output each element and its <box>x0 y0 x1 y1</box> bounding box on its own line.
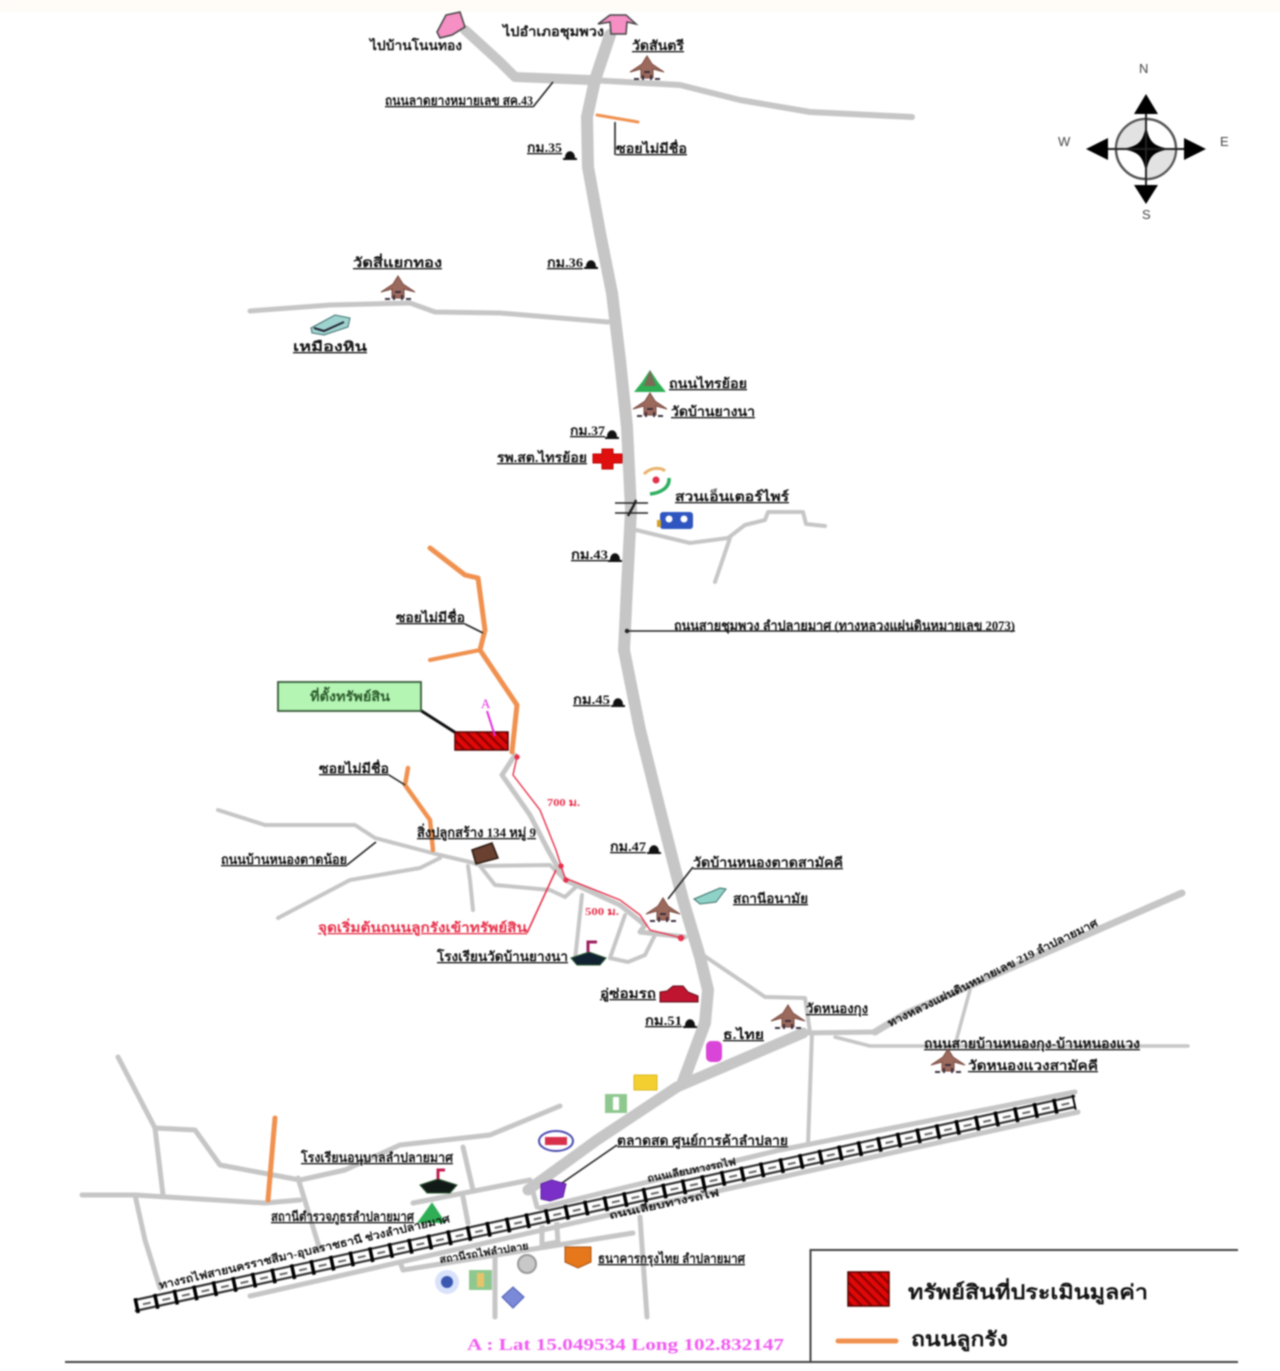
blue round logo <box>435 1270 459 1294</box>
building number label: สิ่งปลูกสร้าง 134 หมู่ 9 <box>417 823 536 841</box>
coordinates: A : Lat 15.049534 Long 102.832147 <box>467 1335 785 1354</box>
leader: callout to property <box>420 710 456 733</box>
label: road with leader <box>385 82 553 108</box>
rail labels right: ถนนเลียบทางรถไฟ <box>608 1186 720 1222</box>
seven eleven sign left <box>605 1094 627 1113</box>
factory icon <box>293 315 367 354</box>
bank icon and label <box>706 1026 764 1062</box>
temple Santri <box>630 38 684 80</box>
label: unnamed alley north <box>615 122 687 156</box>
temple Nong Kung <box>771 1001 868 1029</box>
garden label: สวนเอ็นเตอร์ไพร์ <box>675 487 789 504</box>
compass rose <box>1058 61 1229 222</box>
side roads <box>82 303 1188 1317</box>
km 36: กม.36 <box>547 255 584 270</box>
north-east highway <box>875 893 1182 1032</box>
legend <box>65 1250 1238 1362</box>
label: unnamed alley upper: ซอยไม่มีชื่อ <box>396 608 465 625</box>
distance label 700 m: 700 ม. <box>547 798 581 809</box>
main highway 2073 <box>587 35 708 1082</box>
callout: property location: ที่ตั้งทรัพย์สิน <box>310 686 390 704</box>
km 51 <box>645 1013 697 1028</box>
southern trunk road <box>528 1033 803 1190</box>
camera shop icon <box>657 512 693 529</box>
km 35 north: กม.35 <box>527 140 563 155</box>
rotated highway label: ทางหลวงแผ่นดินหมายเลข 219 ลำปลายมาศ <box>886 916 1101 1030</box>
grey round logo <box>518 1255 536 1273</box>
school <box>436 942 606 965</box>
hospital <box>497 449 622 469</box>
market label and icon: ตลาดสด ศูนย์การค้าลำปลาย <box>617 1133 788 1149</box>
callout: property location <box>278 682 421 711</box>
km 36 <box>547 255 598 270</box>
legend text: laterite road: ถนนลูกรัง <box>911 1329 1008 1353</box>
km 43: กม.43 <box>571 547 609 562</box>
school south west <box>300 1149 457 1193</box>
legend text: property: ทรัพย์สินที่ประเมินมูลค่า <box>908 1277 1148 1306</box>
diamond logo <box>502 1287 524 1308</box>
police station label and icon: สถานีตำรวจภูธรลำปลายมาศ <box>271 1209 415 1225</box>
label: road with leader: ถนนลาดยางหมายเลข สค.43 <box>385 93 533 108</box>
health station <box>694 888 808 906</box>
label: วัดสันตรี <box>632 38 684 53</box>
distance label 500 m: 500 ม. <box>585 907 620 918</box>
temple Nong Waeng: วัดหนองแวงสามัคคี <box>968 1058 1098 1073</box>
rail labels right <box>608 1155 737 1222</box>
bank icon and label: ธ.ไทย <box>723 1026 764 1042</box>
label: unnamed alley lower: ซอยไม่มีชื่อ <box>319 759 389 776</box>
bridge symbol <box>615 500 648 516</box>
rail label left: ทางรถไฟสายนครราชสีมา-อุบลราชธานี ช่วงลำปลายมาศ <box>158 1211 452 1293</box>
compass N: N <box>1139 61 1148 76</box>
station road label: สถานีรถไฟลำปลาย <box>438 1239 530 1266</box>
health station: สถานีอนามัย <box>733 891 808 906</box>
marker A arrow <box>487 711 495 736</box>
garage and car <box>600 986 698 1002</box>
temple Ban Nong Ta Yai: วัดบ้านหนองตาดสามัคคี <box>693 855 843 870</box>
label: unnamed alley north: ซอยไม่มีชื่อ <box>616 139 687 156</box>
highway label: ถนนสายชุมพวง ลำปลายมาศ (ทางหลวงแผ่นดินหมายเลข 2073) <box>674 618 1015 634</box>
label: road left: ถนนบ้านหนองตาดน้อย <box>221 852 347 867</box>
temple Si Yaek Thong <box>353 253 442 300</box>
seven eleven sign south <box>469 1270 492 1290</box>
tree and Sai Yoi label <box>634 370 747 392</box>
top cross road west <box>465 30 590 80</box>
red access route <box>513 755 684 940</box>
label: branch road east: ถนนสายบ้านหนองกุง-บ้านหนองแวง <box>924 1036 1140 1052</box>
km 37 <box>570 423 619 439</box>
label: road left <box>221 842 376 867</box>
railway <box>135 1096 1075 1311</box>
tree and Sai Yoi label: ถนนไทรย้อย <box>669 375 747 391</box>
green and red round logo <box>644 468 669 494</box>
compass W: W <box>1058 134 1071 149</box>
km 35 north <box>527 140 577 160</box>
fuel station logo <box>539 1131 573 1151</box>
icon: destination north <box>598 15 636 34</box>
km 43 <box>571 547 622 562</box>
school south west: โรงเรียนอนุบาลลำปลายมาศ <box>300 1149 454 1166</box>
link to north-east highway <box>803 1032 875 1033</box>
km 51: กม.51 <box>645 1013 682 1028</box>
orange bank logo and label <box>565 1247 746 1268</box>
factory icon: เหมืองหิน <box>293 339 367 354</box>
convenience sign <box>634 1075 657 1090</box>
property parcel <box>455 732 508 750</box>
temple Ban Yang Na: วัดบ้านยางนา <box>671 404 755 419</box>
label: red start point: จุดเริ่มต้นถนนลูกรังเข้าทรัพย์สิน <box>318 918 527 936</box>
top cross road east <box>590 80 912 117</box>
temple Ban Nong Ta Yai <box>646 855 843 922</box>
garage and car: อู่ซ่อมรถ <box>600 986 656 1002</box>
orange bank logo and label: ธนาคารกรุงไทย ลำปลายมาศ <box>598 1250 746 1267</box>
label: unnamed alley upper <box>396 608 483 633</box>
legend line: laterite road <box>838 1338 896 1344</box>
marker A letter: A <box>481 696 491 711</box>
market label and icon <box>541 1133 788 1201</box>
icon: destination west <box>437 12 465 38</box>
km 45: กม.45 <box>573 692 611 707</box>
temple Nong Kung: วัดหนองกุง <box>806 1001 868 1017</box>
temple Si Yaek Thong: วัดสี่แยกทอง <box>353 253 442 270</box>
top edge tint <box>0 0 1280 12</box>
legend swatch: property <box>848 1272 889 1306</box>
km 47 <box>610 839 661 854</box>
label: unnamed alley lower <box>319 759 405 785</box>
school: โรงเรียนวัดบ้านยางนา <box>436 948 568 964</box>
km 45 <box>573 692 625 707</box>
laterite roads <box>268 115 638 1200</box>
rail labels right: ถนนเลียบทางรถไฟ <box>646 1155 737 1185</box>
km 47: กม.47 <box>610 839 647 854</box>
label: red start point <box>318 870 556 936</box>
label: to Ban Non Thong: ไปบ้านโนนทอง <box>368 37 462 53</box>
temple Ban Yang Na <box>633 393 755 419</box>
km 37: กม.37 <box>570 423 606 438</box>
compass S: S <box>1142 207 1151 222</box>
label: to Chum Phuang: ไปอำเภอชุมพวง <box>501 23 604 40</box>
hospital: รพ.สต.ไทรย้อย <box>497 449 587 465</box>
building number label <box>417 823 536 864</box>
temple Nong Waeng <box>931 1049 1098 1073</box>
compass E: E <box>1220 134 1229 149</box>
police station label and icon <box>271 1204 444 1225</box>
